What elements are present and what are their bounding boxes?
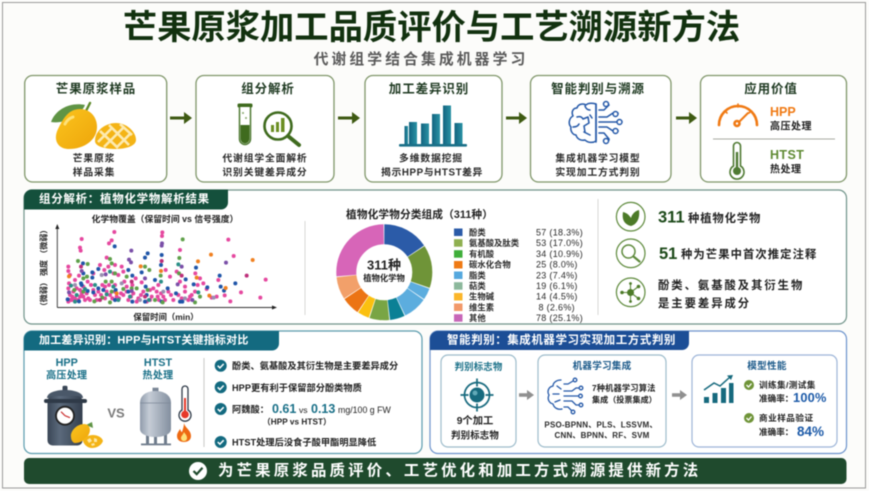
legend: classification: 生物碱 xyxy=(469,292,495,302)
sub-panel: markers xyxy=(441,355,516,447)
arrow: step 4 to 5 xyxy=(676,112,697,124)
stat: 311 phytochemicals xyxy=(616,202,761,231)
panel: HPP vs HTST comparison xyxy=(24,331,422,454)
chart: scatter plot: （微弱） 强度 （微弱） xyxy=(38,226,48,310)
list: key differences: 阿魏酸： xyxy=(232,404,269,414)
icon: HPP vessel with mango xyxy=(44,386,103,448)
panel: intelligent discrimination card: 智能判别与溯源 xyxy=(551,81,645,96)
panel: intelligent discrimination card: 实现加工方式判别 xyxy=(555,166,641,178)
chart: scatter plot: 化学物覆盖（保留时间 vs 信号强度） xyxy=(92,213,238,224)
icon: growth chart xyxy=(704,375,734,403)
sub-panel: performance: 训练集/测试集 xyxy=(759,379,816,390)
legend: classification: 8 (2.6%) xyxy=(538,302,575,312)
list: key differences: 0.13 xyxy=(311,402,335,416)
arrow: ensemble to performance xyxy=(672,390,687,400)
panel: processing difference card: 揭示HPP与HTST差异 xyxy=(381,166,483,178)
legend: classification: 维生素 xyxy=(469,302,494,312)
panel: ensemble machine learning xyxy=(430,331,846,454)
heading: HPP vs HTST: 加工差异识别：HPP与HTST关键指标对比 xyxy=(39,332,249,346)
panel: application value card: 应用价值 xyxy=(744,81,798,96)
label: HTST xyxy=(143,357,173,382)
legend: classification: 氨基酸及肽类 xyxy=(469,238,520,248)
list: key differences: HTST处理后没食子酸甲酯明显降低 xyxy=(232,436,376,448)
legend: classification: 53 (17.0%) xyxy=(536,238,583,248)
sub-panel: ensemble: PSO-BPNN、PLS、LSSVM、 xyxy=(544,420,658,430)
arrow: step 1 to 2 xyxy=(170,112,192,124)
icon: magnifier with chart xyxy=(264,112,299,145)
panel: component analysis card: 代谢组学全面解析 xyxy=(222,152,308,164)
panel: intelligent discrimination card: 集成机器学习模型 xyxy=(555,152,641,164)
legend: classification: 酚类 xyxy=(469,227,486,237)
panel: application value card: HTST xyxy=(770,148,804,162)
stat: main differential components: 是主要差异成分 xyxy=(658,296,751,310)
panel: mango sample card xyxy=(25,76,167,182)
sub-panel: performance: 准确率： xyxy=(759,426,793,437)
list: key differences: HPP更有利于保留部分酚类物质 xyxy=(232,382,362,393)
legend: classification: 碳水化合物 xyxy=(469,260,511,270)
legend: classification: 19 (6.1%) xyxy=(536,281,578,291)
panel: component analysis card: 识别关键差异成分 xyxy=(222,166,308,178)
sub-panel: ensemble: CNN、BPNN、RF、SVM xyxy=(554,431,650,440)
panel: application value card: HPP xyxy=(770,105,796,119)
panel: mango sample card: 样品采集 xyxy=(73,166,115,178)
panel: mango sample card: 芒果原浆样品 xyxy=(56,81,136,96)
label: HTST: HTST xyxy=(144,357,172,369)
legend: classification: 萜类 xyxy=(469,281,486,291)
heading: ensemble machine learning: 智能判别：集成机器学习实现加工方式判别 xyxy=(447,332,676,346)
banner: conclusion xyxy=(24,458,846,484)
legend: classification: 78 (25.1%) xyxy=(536,313,583,323)
legend: classification: 14 (4.5%) xyxy=(536,292,578,302)
panel: application value card: 热处理 xyxy=(770,162,802,176)
subtitle: 代谢组学结合集成机器学习 xyxy=(314,50,528,68)
panel: intelligent discrimination card xyxy=(530,76,671,182)
panel: processing difference card xyxy=(365,76,502,182)
list: key differences: mg/100 g FW xyxy=(338,405,391,415)
stat: 51 first annotations xyxy=(616,239,817,268)
sub-panel: ensemble: 集成（投票集成） xyxy=(592,394,657,404)
panel: application value card: 高压处理 xyxy=(770,120,812,132)
panel: phytochemical results xyxy=(24,190,846,324)
stat: main differential components: 酚类、氨基酸及其衍生物 xyxy=(658,278,804,292)
icon: thermometer xyxy=(730,142,744,179)
icon: HTST vessel xyxy=(140,388,171,445)
label: HTST: 热处理 xyxy=(143,368,173,382)
arrow: markers to ensemble xyxy=(519,390,534,400)
icon: flame xyxy=(177,423,191,442)
panel: processing difference card: 多维数据挖掘 xyxy=(399,152,463,164)
icon: bar chart xyxy=(399,106,467,147)
sub-panel: markers: 判别标志物 xyxy=(455,361,503,372)
legend: classification xyxy=(454,227,583,323)
sub-panel: ensemble: 机器学习集成 xyxy=(573,360,632,372)
label: HPP xyxy=(46,357,87,382)
list: key differences xyxy=(215,360,398,448)
legend: classification: 57 (18.3%) xyxy=(536,227,583,237)
label: HPP: 高压处理 xyxy=(46,368,87,382)
stat: 311 phytochemicals: 311 xyxy=(658,208,685,226)
icon: circuit brain xyxy=(548,378,583,414)
sub-panel: ensemble: 7种机器学习算法 xyxy=(592,383,656,393)
panel: application value card xyxy=(700,76,846,182)
icon: brain circuit xyxy=(569,102,622,144)
sub-panel: markers: 判别标志物 xyxy=(451,430,499,440)
chart: classification donut: 植物化学物 xyxy=(363,273,405,283)
icon: pressure gauge xyxy=(719,104,757,126)
stat: 51 first annotations: 种为芒果中首次推定注释 xyxy=(681,247,817,261)
chart: scatter plot: 保留时间（min） xyxy=(133,312,199,322)
title: 芒果原浆加工品质评价与工艺溯源新方法 xyxy=(123,9,740,47)
panel: component analysis card xyxy=(196,76,334,182)
banner: conclusion: 为芒果原浆品质评价、工艺优化和加工方式溯源提供新方法 xyxy=(218,460,701,480)
icon: test tube xyxy=(238,104,252,144)
panel: component analysis card: 组分解析 xyxy=(241,81,295,96)
legend: classification: 其他 xyxy=(469,313,486,323)
heading: ensemble machine learning xyxy=(430,331,689,350)
stat: main differential components xyxy=(616,278,804,310)
list: key differences: （HPP vs HTST） xyxy=(262,418,331,426)
panel: mango sample card: 芒果原浆 xyxy=(73,152,115,164)
stat: 311 phytochemicals: 种植物化学物 xyxy=(688,211,761,225)
legend: classification: 有机酸 xyxy=(469,249,495,259)
panel: processing difference card: 加工差异识别 xyxy=(389,81,469,96)
chart: classification donut xyxy=(346,208,493,310)
sub-panel: performance: 准确率： xyxy=(759,392,793,404)
arrow: step 3 to 4 xyxy=(506,112,527,124)
sub-panel: performance: 100% xyxy=(793,390,827,405)
icon: mango xyxy=(51,103,136,149)
legend: classification: 脂类 xyxy=(469,270,486,280)
heading: phytochemical results xyxy=(24,190,228,210)
legend: classification: 34 (10.9%) xyxy=(536,249,583,259)
list: key differences: vs xyxy=(299,405,308,415)
legend: classification: 23 (7.4%) xyxy=(536,270,578,280)
icon: red thermometer xyxy=(179,386,191,421)
arrow: step 2 to 3 xyxy=(338,112,360,124)
chart: scatter plot xyxy=(38,213,277,322)
sub-panel: performance: 商业样品验证 xyxy=(759,412,814,423)
chart: classification donut: 植物化学物分类组成（311种） xyxy=(346,208,493,221)
label: HPP: HPP xyxy=(56,357,78,369)
list: key differences: 酚类、氨基酸及其衍生物是主要差异成分 xyxy=(232,360,398,371)
stat: 51 first annotations: 51 xyxy=(659,245,677,263)
icon: target xyxy=(460,378,494,412)
sub-panel: performance xyxy=(692,355,837,447)
sub-panel: markers: 9个加工 xyxy=(457,414,493,427)
sub-panel: performance: 模型性能 xyxy=(747,360,787,372)
chart: classification donut: 311种 xyxy=(367,258,401,272)
sub-panel: performance: 84% xyxy=(797,424,824,439)
list: key differences: 0.61 xyxy=(272,402,296,416)
heading: phytochemical results: 组分解析：植物化学物解析结果 xyxy=(39,192,210,206)
sub-panel: ensemble xyxy=(538,355,666,447)
heading: HPP vs HTST xyxy=(24,331,279,350)
text: VS: VS xyxy=(107,406,125,420)
legend: classification: 25 (8.0%) xyxy=(536,260,578,270)
